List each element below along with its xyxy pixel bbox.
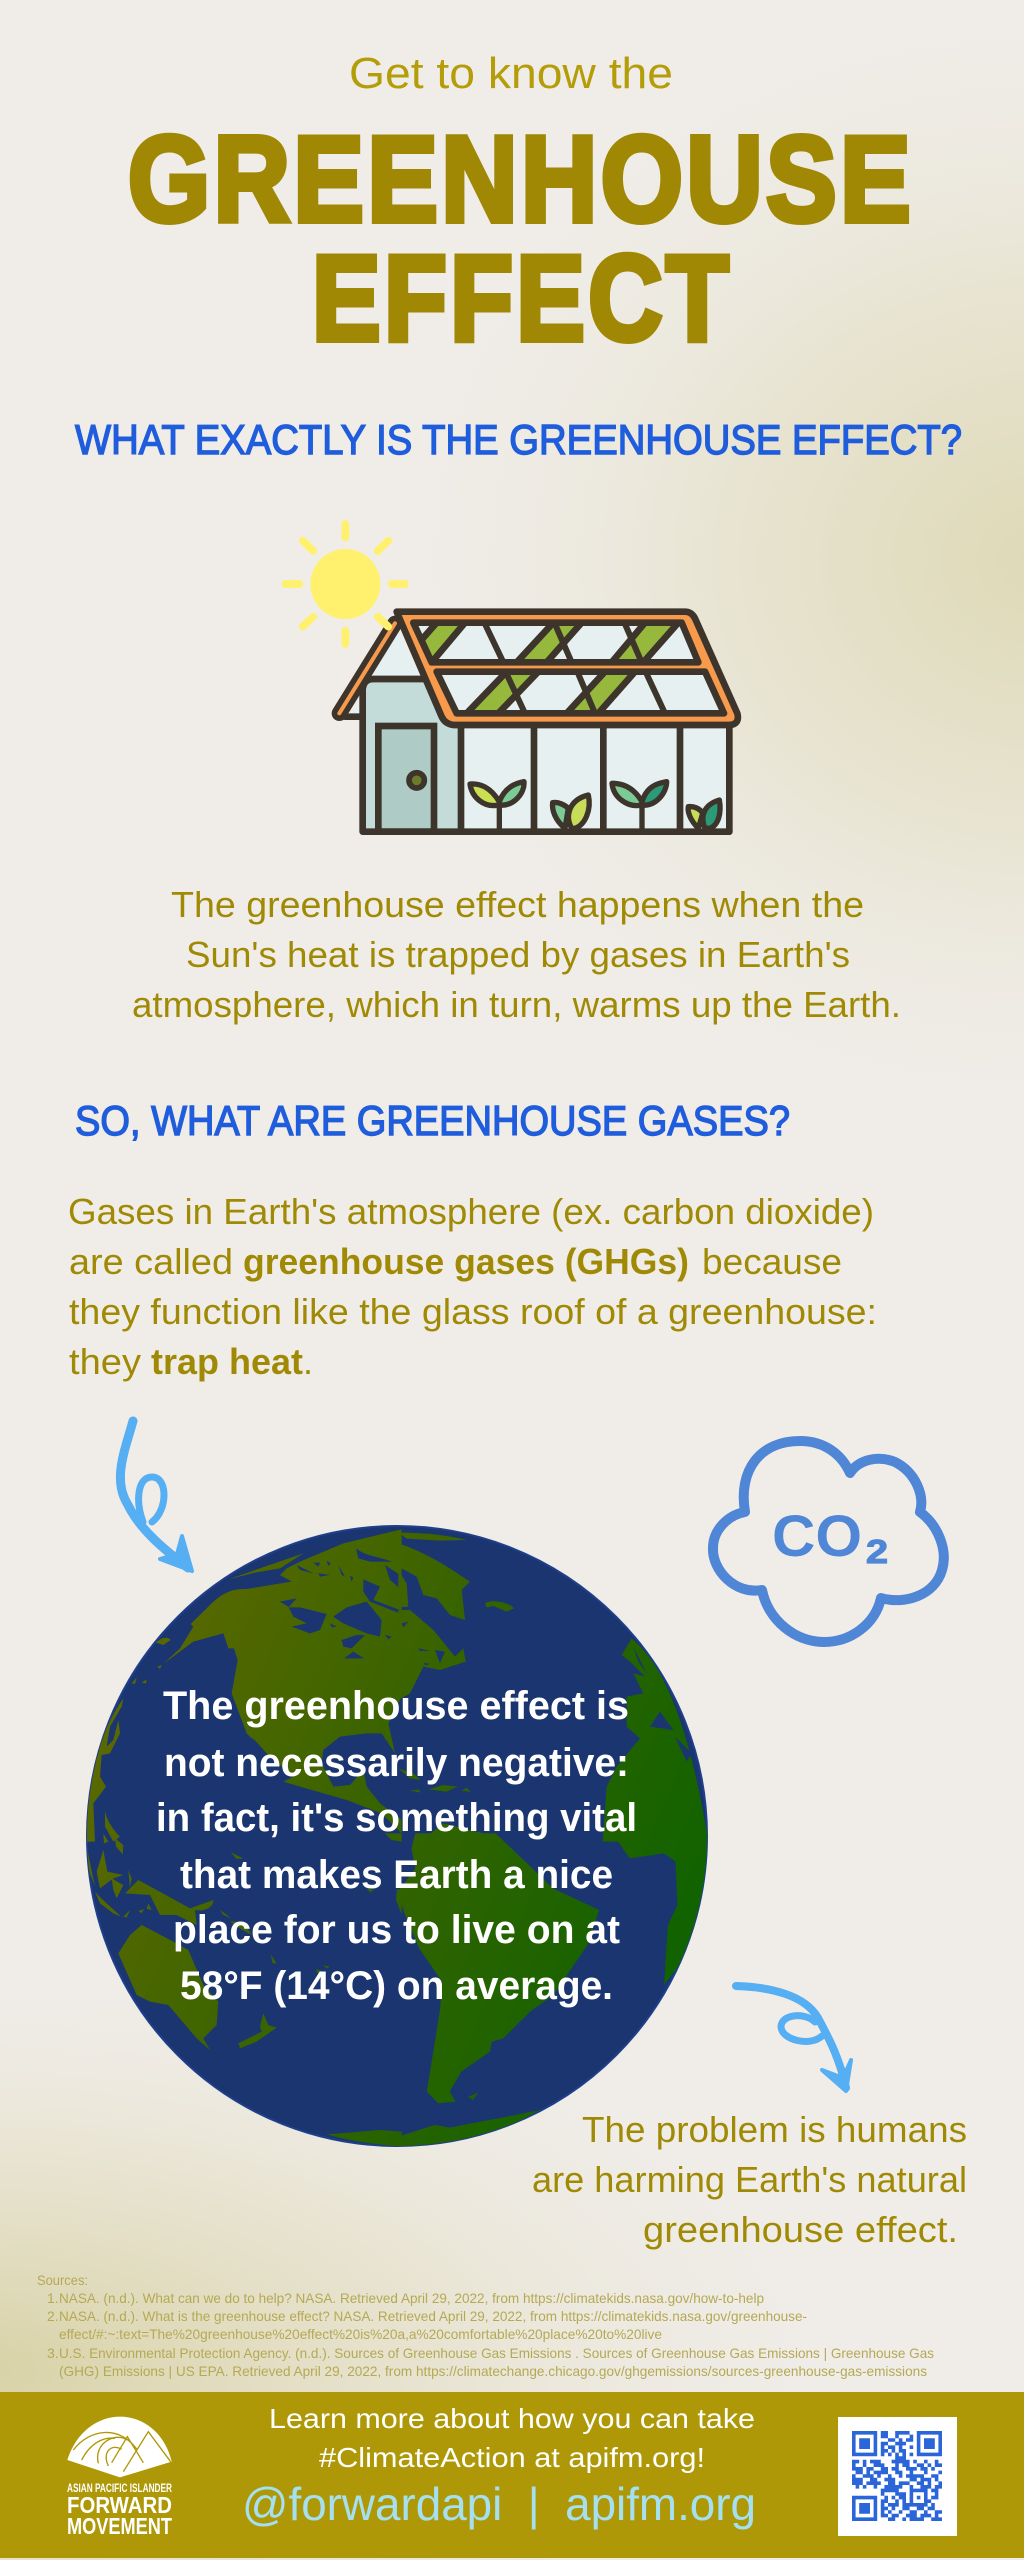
land: south-west quadrant [87, 1833, 402, 2147]
land: south-east quadrant [398, 1833, 712, 2150]
continents [86, 1529, 712, 2150]
text: earth message: place for us to live on at [173, 1908, 620, 1952]
text: earth message: that makes Earth a nice [180, 1853, 613, 1897]
roof pane lower [437, 672, 724, 713]
QR code [838, 2417, 957, 2536]
text: greenhouse gases definition: Gases in Earth's atmosphere (ex. carbon dioxide) [68, 1191, 874, 1232]
text: greenhouse gases definition [68, 1191, 877, 1382]
text: call to action: Learn more about how you can take [269, 2403, 755, 2434]
glass wall [462, 727, 729, 832]
arrow: to earth [120, 1421, 192, 1571]
door [378, 726, 434, 832]
roof eave [339, 623, 395, 713]
text: sources: 1. [47, 2290, 59, 2306]
panel: footer [0, 2392, 1024, 2558]
icon: APIFM logo: MOVEMENT [67, 2513, 172, 2539]
text: social handles: @forwardapi | apifm.org [242, 2478, 756, 2530]
text: greenhouse effect explanation [132, 884, 901, 1025]
wall frame [345, 679, 729, 832]
text: greenhouse gases definition: because [702, 1241, 842, 1282]
text: sources: Sources: [37, 2272, 88, 2288]
text: sources: 2. [47, 2308, 59, 2324]
text: greenhouse gases definition: greenhouse gases (GHGs) [243, 1241, 689, 1282]
text: earth message: The greenhouse effect is [163, 1684, 629, 1728]
text: earth message: 58°F (14°C) on average. [180, 1964, 613, 2008]
text: greenhouse effect explanation: The greenhouse effect happens when the [171, 884, 864, 925]
text: sources [37, 2272, 934, 2379]
plants [470, 782, 720, 830]
text: the problem: The problem is humans [582, 2109, 967, 2150]
text: sources: effect/#:~:text=The%20greenhouse%20effect%20is%20a,a%20comfortable%20place%20to%20live [59, 2326, 662, 2342]
icon: APIFM logo: FORWARD [67, 2492, 172, 2518]
text: call to action [269, 2403, 755, 2473]
icon: greenhouse with sun [285, 524, 738, 832]
text: the problem [532, 2109, 967, 2250]
land: north-east quadrant [398, 1533, 708, 1842]
icon: CO2 cloud [713, 1441, 944, 1642]
text: the problem: are harming Earth's natural [532, 2159, 967, 2200]
title kicker: Get to know the [349, 49, 673, 98]
land: north-west quadrant [86, 1529, 402, 1842]
front wall [363, 682, 462, 832]
gable glass [372, 630, 421, 677]
text: the problem: greenhouse effect. [643, 2209, 958, 2250]
text: greenhouse gases definition: are called [69, 1241, 233, 1282]
sun [285, 524, 405, 644]
icon: CO2 cloud: 2 [866, 1533, 888, 1570]
roof pane upper [413, 623, 698, 662]
arrow: to the problem [736, 1986, 851, 2091]
text: sources: NASA. (n.d.). What can we do to help? NASA. Retrieved April 29, 2022, from https://climatekids.nasa.gov/how-to-help [59, 2290, 764, 2306]
text: call to action: #ClimateAction at apifm.org! [319, 2442, 705, 2473]
text: greenhouse gases definition: trap heat [151, 1341, 303, 1382]
text: earth message: in fact, it's something vital [156, 1796, 637, 1840]
title line 2: EFFECT [312, 230, 732, 366]
roof [397, 612, 738, 725]
text: greenhouse gases definition: . [303, 1341, 313, 1382]
text: greenhouse gases definition: they [69, 1341, 141, 1382]
text: sources: NASA. (n.d.). What is the greenhouse effect? NASA. Retrieved April 29, 2022, from https://climatekids.nasa.gov/greenhouse- [59, 2308, 807, 2324]
text: greenhouse gases definition: they function like the glass roof of a greenhouse: [69, 1291, 877, 1332]
text: sources: 3. [47, 2345, 59, 2361]
text: earth message [156, 1684, 637, 2008]
panel: earth globe [86, 1526, 712, 2150]
icon: APIFM logo [67, 2417, 172, 2539]
title line 1: GREENHOUSE [128, 111, 914, 247]
text: greenhouse effect explanation: Sun's heat is trapped by gases in Earth's [186, 934, 850, 975]
heading: what exactly is the greenhouse effect: WHAT EXACTLY IS THE GREENHOUSE EFFECT? [75, 416, 962, 463]
title [128, 49, 914, 366]
text: sources: (GHG) Emissions | US EPA. Retrieved April 29, 2022, from https://climatechange.chicago.gov/ghgemissions/sources-greenhouse-gas-emissions [59, 2363, 927, 2379]
heading: what are greenhouse gases: SO, WHAT ARE GREENHOUSE GASES? [75, 1097, 790, 1144]
icon: APIFM logo: ASIAN PACIFIC ISLANDER [67, 2481, 172, 2495]
text: earth message: not necessarily negative: [164, 1741, 629, 1785]
icon: CO2 cloud: CO [772, 1504, 862, 1569]
text: greenhouse effect explanation: atmosphere, which in turn, warms up the Earth. [132, 984, 901, 1025]
text: sources: U.S. Environmental Protection Agency. (n.d.). Sources of Greenhouse Gas Emissions . Sources of Greenhouse Gas Emissions | Greenhouse Gas [59, 2345, 934, 2361]
